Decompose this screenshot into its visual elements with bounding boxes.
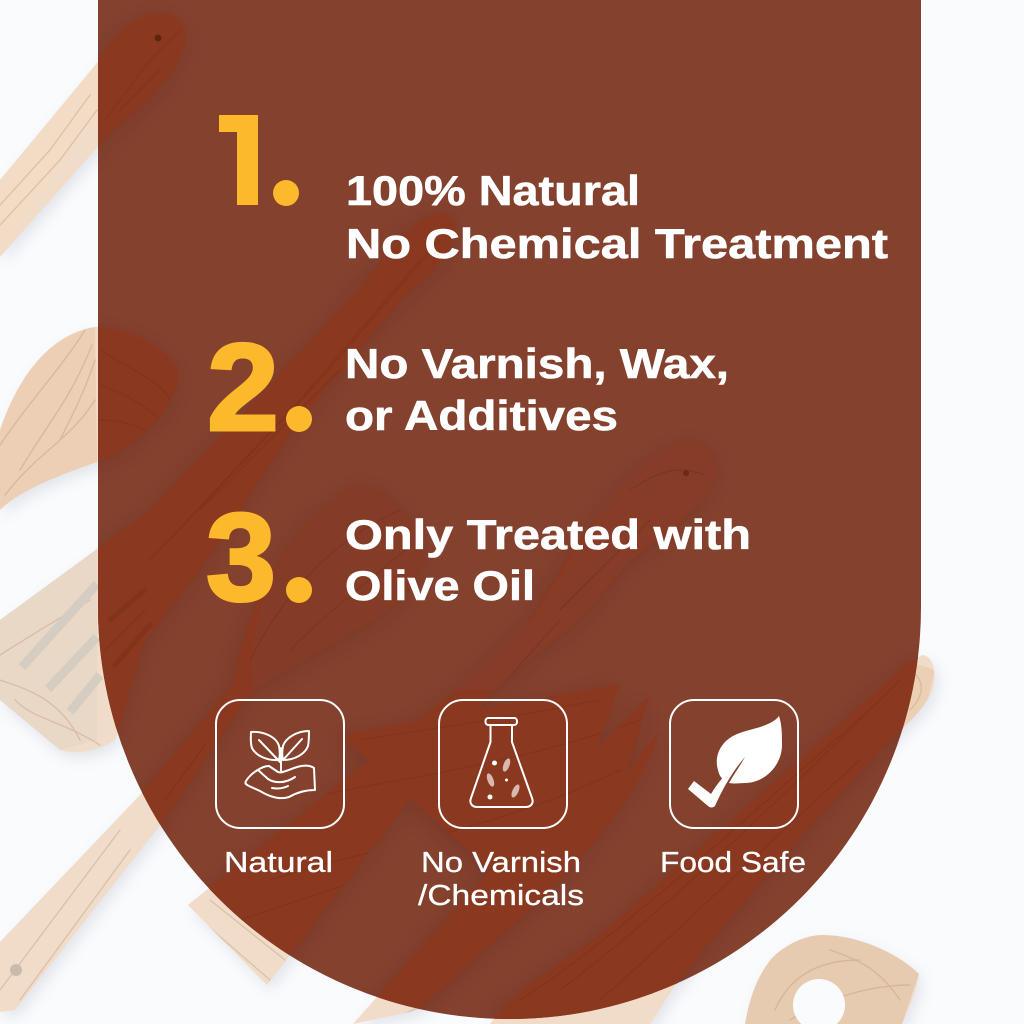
- number 3: [206, 489, 312, 627]
- item 2: [207, 319, 729, 457]
- heading: 100% Natural, No Chemical Treatment: No Chemical Treatment: [346, 220, 888, 267]
- number 1: [219, 115, 299, 206]
- label: No Varnish /Chemicals: No Varnish: [421, 847, 581, 879]
- icon box: leaf and check: [670, 700, 798, 828]
- badge: Natural: [216, 700, 344, 879]
- panel: brown arched background: [98, 0, 921, 1019]
- label: Food Safe: Food Safe: [660, 847, 806, 879]
- utensil shadows: [2, 147, 941, 1024]
- soft shadows under panel: [360, 705, 629, 874]
- heading: No Varnish, Wax, or Additives: No Varnish, Wax,: [345, 340, 729, 387]
- number 2: [207, 319, 312, 457]
- hole in cut-out spoon: [793, 979, 845, 1024]
- badge: No Varnish / Chemicals: [418, 700, 584, 912]
- number 2: 2: [207, 319, 279, 457]
- knot in spoon: [154, 34, 162, 42]
- heading: No Varnish, Wax, or Additives: or Additives: [345, 392, 618, 439]
- number 1: 1: [217, 92, 259, 230]
- heading: Only Treated with Olive Oil: Olive Oil: [345, 562, 535, 609]
- hole in spoon handle: [10, 964, 22, 976]
- heading: Only Treated with Olive Oil: [345, 511, 751, 609]
- knot in large spoon: [683, 470, 689, 476]
- item 1: [219, 115, 888, 259]
- muted upper spoon heads: [456, 441, 716, 690]
- icon box: flask: [439, 700, 567, 828]
- utensils seen through panel: [98, 13, 918, 1019]
- heading: 100% Natural, No Chemical Treatment: 100% Natural: [346, 167, 640, 214]
- label: Natural: Natural: [224, 847, 333, 879]
- heading: No Varnish, Wax, or Additives: [345, 340, 729, 439]
- slots in slotted spatula: [22, 584, 100, 712]
- heading: 100% Natural, No Chemical Treatment: [346, 167, 888, 267]
- number 3: 3: [206, 489, 276, 627]
- label: No Varnish /Chemicals: [418, 847, 584, 912]
- badge: Food Safe: [660, 700, 806, 879]
- heading: Only Treated with Olive Oil: Only Treated with: [345, 511, 751, 558]
- item 3: [206, 489, 751, 627]
- label: No Varnish /Chemicals: /Chemicals: [418, 880, 584, 912]
- icon box: plant in hand: [216, 700, 344, 828]
